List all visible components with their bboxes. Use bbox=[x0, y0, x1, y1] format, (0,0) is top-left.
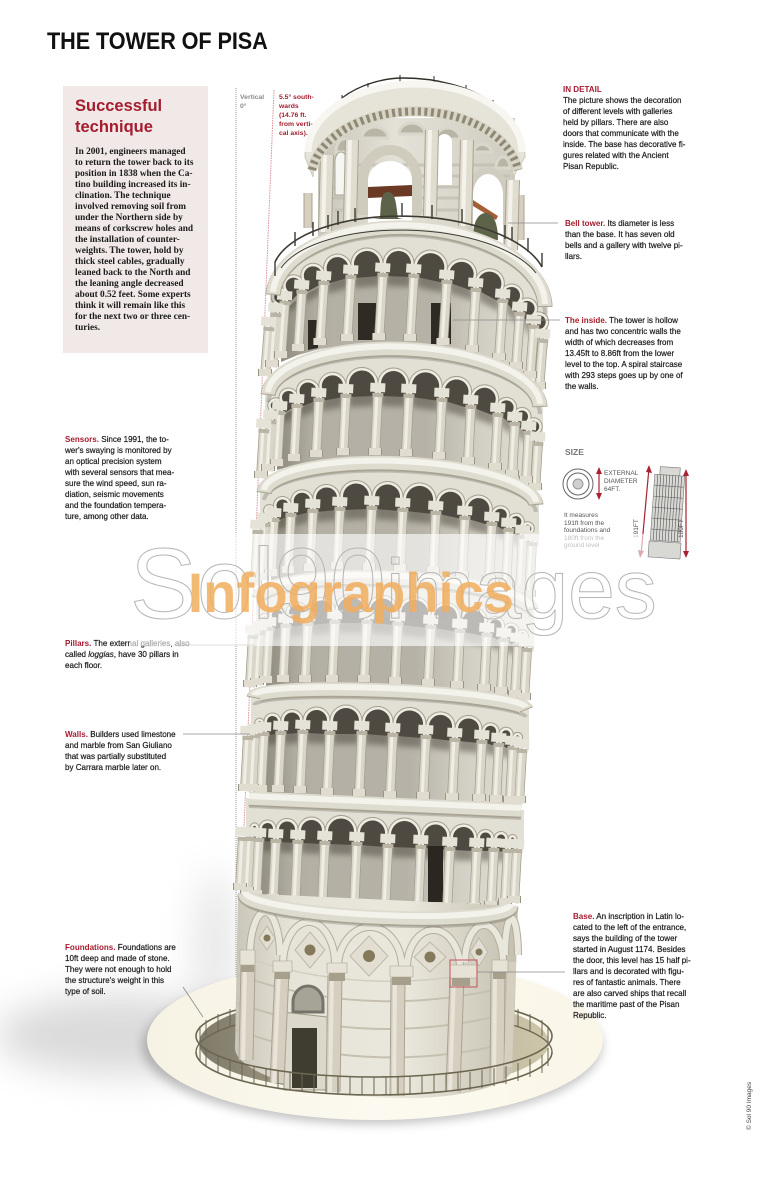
roof ring bbox=[305, 83, 525, 177]
belfry columns bbox=[323, 130, 513, 250]
label: lean angle: from verti- bbox=[279, 121, 313, 128]
text: bell tower bbox=[565, 219, 683, 261]
belfry back columns bbox=[308, 193, 520, 240]
text: measures: ground level bbox=[564, 542, 599, 549]
text: base: Republic. bbox=[573, 1011, 607, 1020]
door jambs and lintel bbox=[282, 1012, 327, 1090]
panel body text: the installation of counter- bbox=[75, 235, 180, 245]
text: foundations: Foundations. Foundations are bbox=[65, 943, 176, 952]
text: foundations: 10ft deep and made of stone. bbox=[65, 954, 170, 963]
panel body text: turies. bbox=[75, 323, 100, 333]
text: bell tower: llars. bbox=[565, 252, 582, 261]
heading: size: SIZE bbox=[565, 447, 584, 457]
text: the inside: 13.45ft to 8.86ft from the lower bbox=[565, 349, 674, 358]
text: sensors: Sensors. Since 1991, the to- bbox=[65, 435, 169, 444]
text: base: llars and is decorated with figu- bbox=[573, 967, 684, 976]
panel heading: technique bbox=[75, 118, 153, 136]
label: lean angle: (14.76 ft. bbox=[279, 112, 307, 119]
text: the inside: the walls. bbox=[565, 382, 599, 391]
panel body text: thick steel cables, gradually bbox=[75, 257, 184, 267]
panel body text: under the Northern side by bbox=[75, 213, 183, 223]
dark doorways bbox=[308, 303, 451, 350]
bell beam bbox=[368, 185, 412, 198]
text: in detail: doors that communicate with the bbox=[563, 129, 679, 138]
stone courses bbox=[236, 955, 515, 1057]
text: bell tower: than the base. It has seven old bbox=[565, 230, 675, 239]
title: THE TOWER OF PISA bbox=[47, 28, 268, 55]
size height labels: 191FT bbox=[633, 519, 640, 538]
door lunette bbox=[293, 986, 323, 1012]
label: external diameter: 64FT. bbox=[604, 486, 620, 493]
text: base: Base. An inscription in Latin lo- bbox=[573, 912, 684, 921]
floor 5 colonnade bbox=[260, 347, 543, 490]
panel body text: about 0.52 feet. Some experts bbox=[75, 290, 191, 300]
text: in detail: inside. The base has decorative fi- bbox=[563, 140, 685, 149]
floor 1 colonnade bbox=[239, 798, 524, 915]
text: the inside bbox=[564, 316, 683, 391]
label: vertical: 0° bbox=[240, 103, 246, 110]
right opening bbox=[473, 174, 503, 250]
text: the inside: The inside. The tower is hollow bbox=[565, 316, 678, 325]
text: pillars: called loggias, have 30 pillars in bbox=[65, 650, 179, 659]
text: pillars: each floor. bbox=[65, 661, 102, 670]
gallery railing bbox=[275, 203, 542, 276]
text: the inside: and has two concentric walls the bbox=[565, 327, 681, 336]
panel body text: position in 1838 when the Ca- bbox=[75, 169, 193, 179]
text: in detail: IN DETAIL bbox=[563, 85, 602, 94]
text: sensors: diation, seismic movements bbox=[65, 490, 164, 499]
ground shadow bbox=[0, 870, 602, 1124]
marble stripes bbox=[330, 165, 520, 210]
text: sensors: and the foundation tempera- bbox=[65, 501, 166, 510]
label: lean angle: wards bbox=[279, 103, 299, 110]
panel heading: Successful bbox=[75, 97, 162, 115]
label: lean angle: 5.5° south- bbox=[279, 94, 314, 101]
watermark wash bbox=[130, 534, 647, 646]
text: walls bbox=[65, 730, 176, 772]
panel body text: the leaning angle decreased bbox=[75, 279, 184, 289]
bell bbox=[373, 192, 403, 219]
text: sensors: sure the wind speed, sun ra- bbox=[65, 479, 167, 488]
belfry bbox=[305, 83, 525, 250]
back railing bbox=[196, 995, 552, 1052]
front fence bbox=[196, 1036, 552, 1095]
main arch opening bbox=[368, 161, 412, 228]
text: foundations: They were not enough to hold bbox=[65, 965, 171, 974]
text: the inside: width of which decreases from bbox=[565, 338, 673, 347]
watermark: Sol90images bbox=[130, 528, 657, 640]
text: the inside: level to the top. A spiral staircase bbox=[565, 360, 682, 369]
right beam bbox=[473, 200, 498, 220]
text: measures bbox=[564, 512, 610, 549]
right opening ring bbox=[470, 171, 506, 250]
label: vertical bbox=[240, 94, 264, 110]
text: sensors: with several sensors that mea- bbox=[65, 468, 174, 477]
text: bell tower: Bell tower. Its diameter is less bbox=[565, 219, 674, 228]
text: in detail bbox=[563, 85, 686, 171]
panel heading bbox=[75, 97, 162, 136]
label: external diameter: EXTERNAL bbox=[604, 470, 638, 477]
drum body bbox=[235, 893, 518, 1098]
floor 3 colonnade bbox=[249, 576, 534, 700]
size height labels: 180FT bbox=[678, 519, 685, 538]
height arrows bbox=[638, 465, 689, 558]
panel body text: think it will remain like this bbox=[75, 301, 185, 311]
panel body text: clination. The technique bbox=[75, 191, 171, 201]
text: sensors: ture, among other data. bbox=[65, 512, 149, 521]
left window bbox=[335, 152, 347, 195]
panel body text bbox=[75, 147, 194, 333]
panel body text: tino building increased its in- bbox=[75, 180, 191, 190]
text: in detail: The picture shows the decoration bbox=[563, 96, 682, 105]
dentil frieze bbox=[312, 111, 518, 170]
text: base: the maritime past of the Pisan bbox=[573, 1000, 679, 1009]
label: lean angle bbox=[279, 94, 314, 137]
text: sensors: wer's swaying is monitored by bbox=[65, 446, 172, 455]
panel body text: weights. The tower, hold by bbox=[75, 246, 183, 256]
text: sensors: an optical precision system bbox=[65, 457, 162, 466]
cornices bbox=[245, 225, 545, 926]
text: base: the door, this level has 15 half pi- bbox=[573, 956, 691, 965]
panel body text: for the next two or three cen- bbox=[75, 312, 190, 322]
text: base: cated to the left of the entrance, bbox=[573, 923, 686, 932]
base drum bbox=[235, 893, 518, 1098]
red detail box bbox=[450, 960, 477, 987]
belfry drum wall bbox=[318, 118, 515, 250]
right window bbox=[437, 134, 452, 185]
floor 6 top colonnade bbox=[264, 225, 548, 389]
panel: successful technique bbox=[63, 86, 208, 353]
text: in detail: of different levels with galleries bbox=[563, 107, 672, 116]
text: walls: that was partially substituted bbox=[65, 752, 166, 761]
text: measures: foundations and bbox=[564, 527, 610, 534]
text: walls: by Carrara marble later on. bbox=[65, 763, 161, 772]
panel body text: In 2001, engineers managed bbox=[75, 147, 186, 157]
sunken moat bbox=[199, 994, 549, 1092]
label: vertical: Vertical bbox=[240, 94, 264, 101]
text: sensors bbox=[64, 435, 174, 521]
diameter arrow bbox=[596, 467, 602, 500]
size diagram circles bbox=[563, 469, 593, 499]
blind arches bbox=[336, 123, 510, 168]
panel body text: means of corkscrew holes and bbox=[75, 224, 193, 234]
watermark: Sol90images: images bbox=[386, 542, 657, 636]
floor 2 colonnade bbox=[244, 689, 529, 806]
text: in detail: held by pillars. There are also bbox=[563, 118, 668, 127]
label: lean angle: cal axis). bbox=[279, 130, 308, 137]
watermark: Sol90images: Sol90 bbox=[130, 528, 386, 640]
door opening bbox=[292, 1028, 317, 1088]
text: walls: and marble from San Giuliano bbox=[65, 741, 172, 750]
rosettes bbox=[264, 934, 482, 962]
main arch ring bbox=[363, 150, 417, 215]
text: foundations bbox=[65, 943, 176, 996]
roof highlight bbox=[308, 84, 522, 152]
text: base: started in August 1174. Besides bbox=[573, 945, 686, 954]
vertical reference lines bbox=[236, 88, 274, 1005]
doorway bbox=[428, 846, 443, 902]
leader lines bbox=[174, 223, 565, 1017]
circular platform bbox=[147, 960, 603, 1120]
text: the inside: with 293 steps goes up by one of bbox=[565, 371, 683, 380]
text: foundations: type of soil. bbox=[65, 987, 106, 996]
text: pillars: Pillars. The external galleries, also bbox=[65, 639, 190, 648]
text: walls: Walls. Builders used limestone bbox=[65, 730, 176, 739]
text: in detail: gures related with the Ancient bbox=[563, 151, 669, 160]
watermark: Infographics: Infographics bbox=[188, 561, 514, 624]
text: bell tower: bells and a gallery with twelve pi- bbox=[565, 241, 683, 250]
capitals bbox=[240, 950, 508, 986]
panel body text: to return the tower back to its bbox=[75, 158, 193, 168]
floor 4 colonnade bbox=[254, 461, 539, 597]
text: measures: It measures bbox=[564, 512, 598, 519]
text: measures: 180ft from the bbox=[564, 535, 604, 542]
text: base: res of fantastic animals. There bbox=[573, 978, 681, 987]
text: foundations: the structure's weight in this bbox=[65, 976, 164, 985]
right bell bbox=[473, 213, 498, 240]
text: base: are also carved ships that recall bbox=[573, 989, 686, 998]
mini tower icon bbox=[648, 466, 686, 559]
panel body text: leaned back to the North and bbox=[75, 268, 190, 278]
panel body text: involved removing soil from bbox=[75, 202, 186, 212]
text: base bbox=[573, 912, 691, 1020]
diamond panels bbox=[259, 926, 488, 976]
size height labels bbox=[633, 519, 685, 538]
text: measures: 191ft from the bbox=[564, 520, 604, 527]
text: base: says the building of the tower bbox=[573, 934, 677, 943]
label: external diameter: DIAMETER bbox=[604, 478, 638, 485]
roof top railing bbox=[342, 75, 493, 107]
half columns bbox=[243, 962, 512, 1096]
text: pillars bbox=[65, 639, 190, 670]
text: in detail: Pisan Republic. bbox=[563, 162, 619, 171]
credit: © Sol 90 Images bbox=[746, 1082, 753, 1130]
blind arches bbox=[250, 912, 518, 968]
label: external diameter bbox=[604, 470, 638, 493]
